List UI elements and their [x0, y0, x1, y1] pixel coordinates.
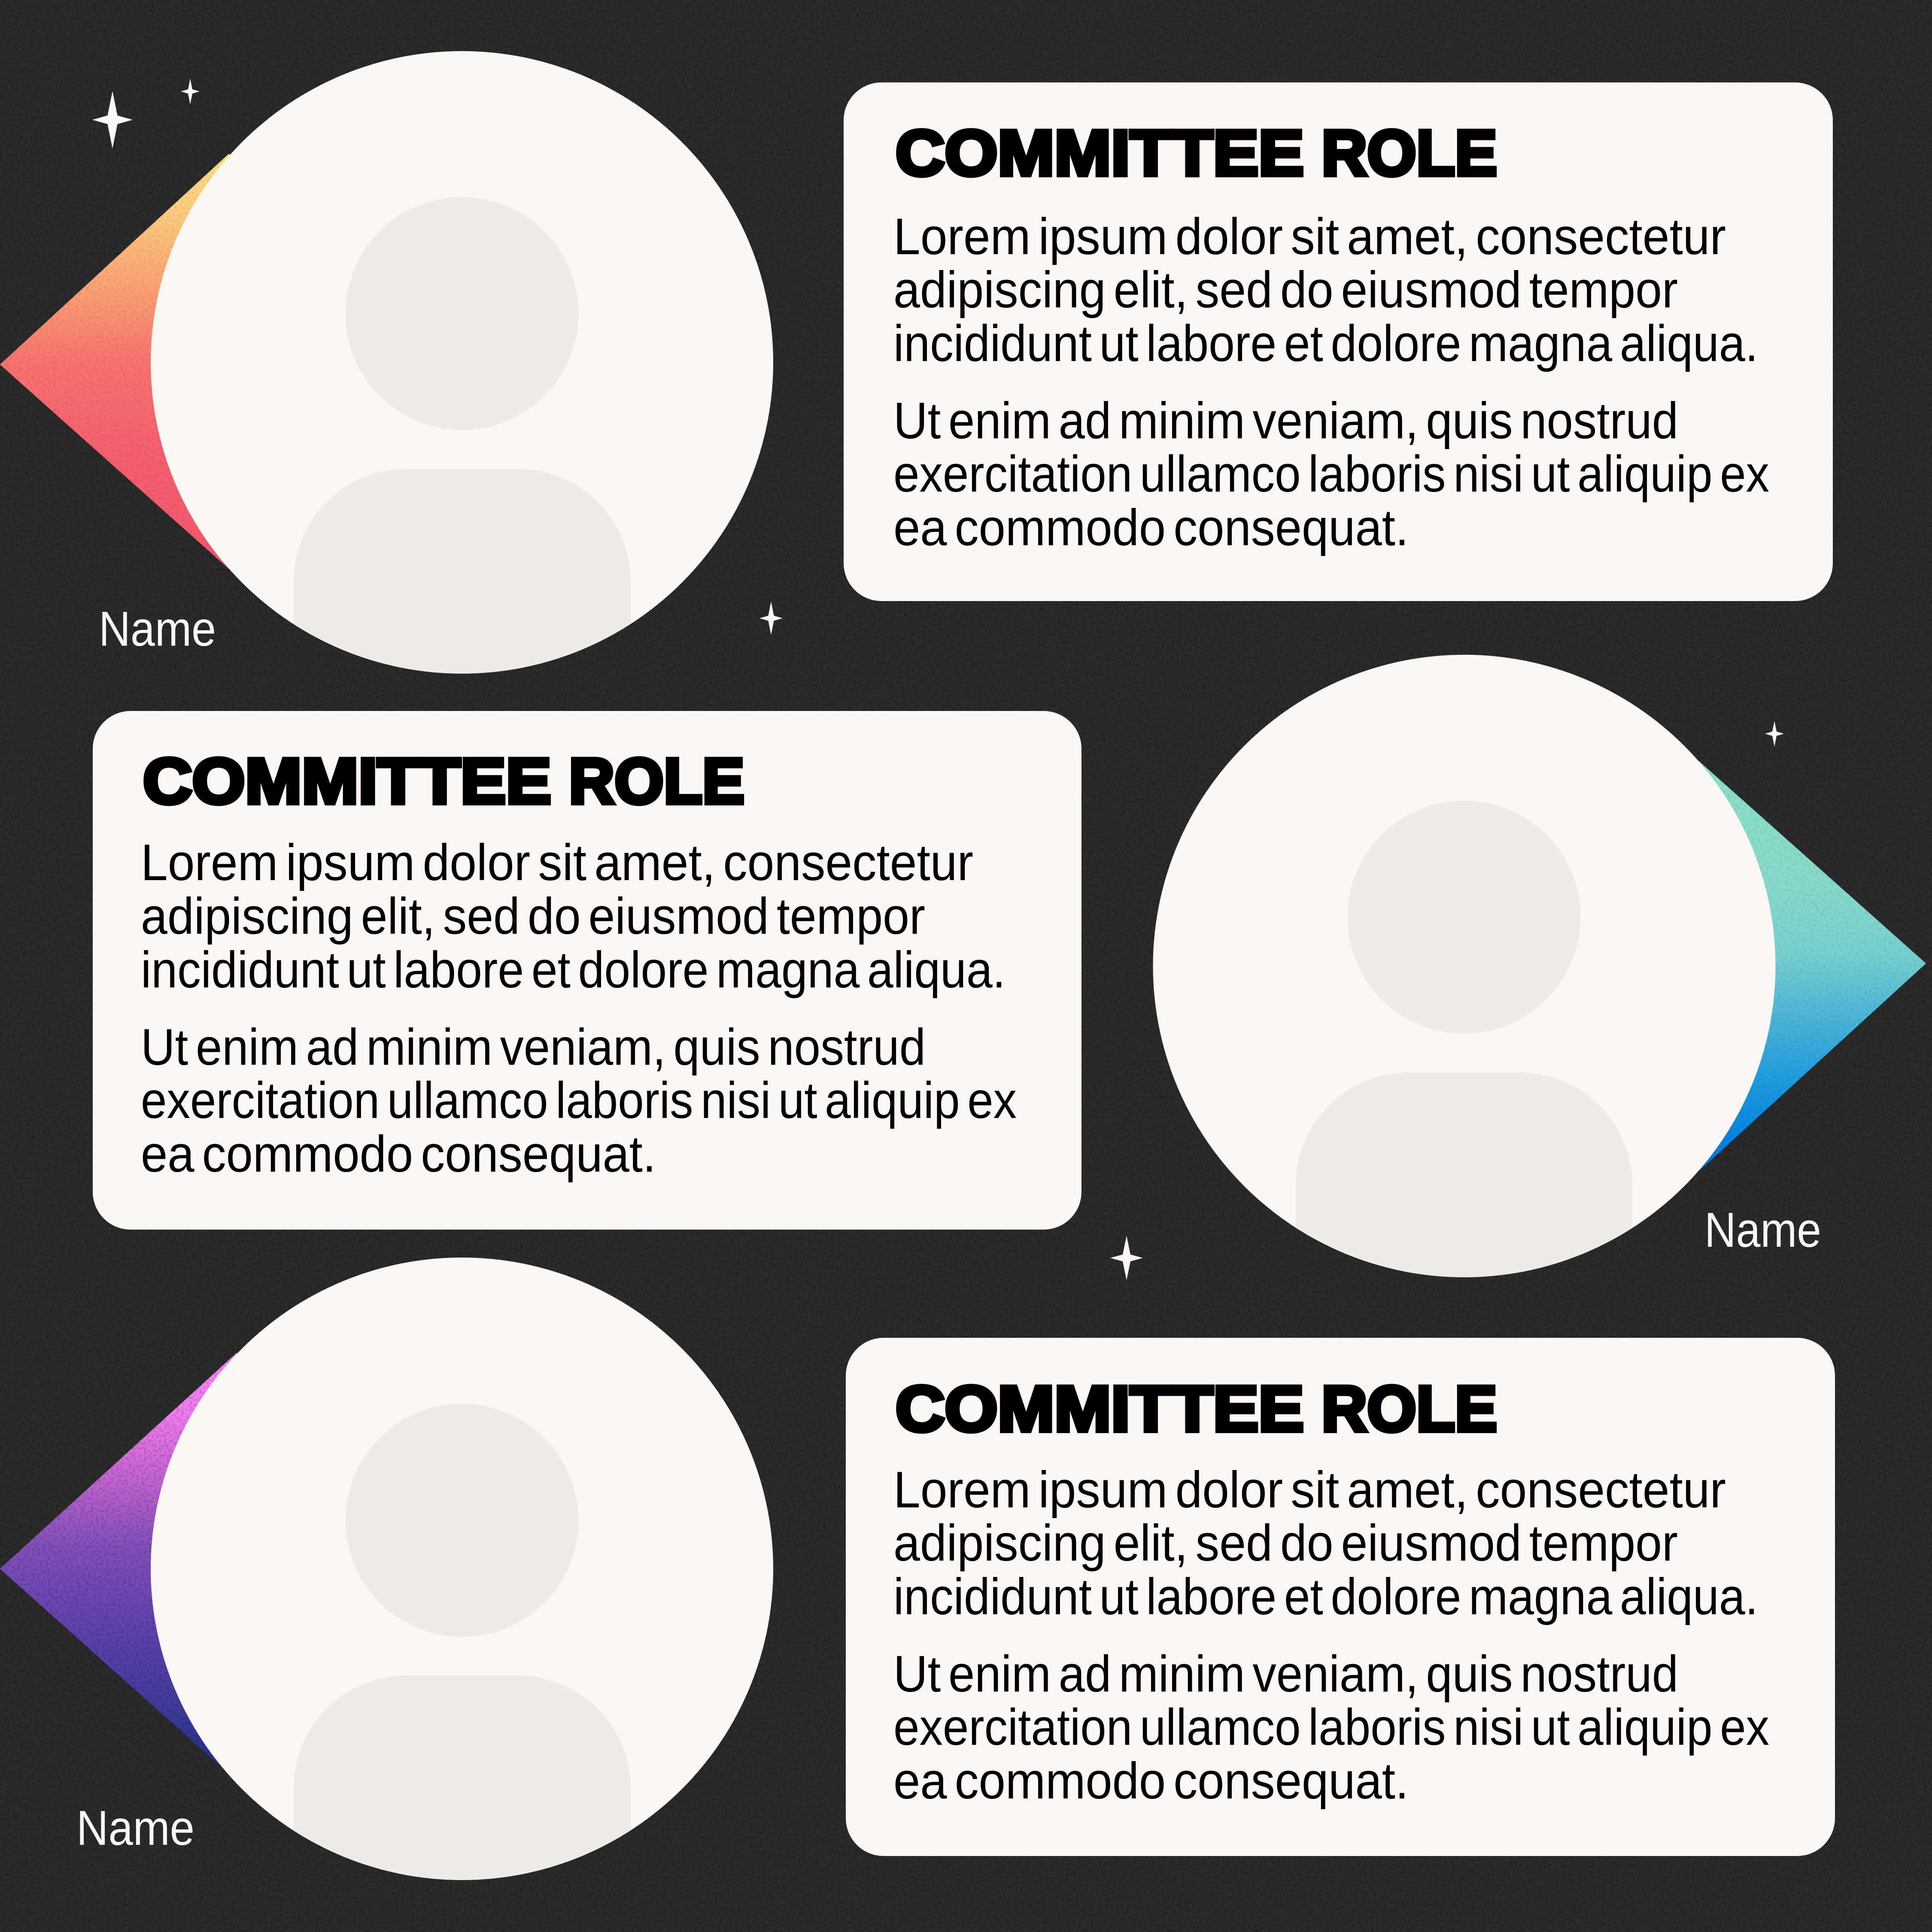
- body text 2: [141, 834, 1017, 1183]
- name label 2: Name: [1704, 1203, 1821, 1258]
- panel: role card 2: [93, 711, 1081, 1230]
- body text 1: Ut enim ad minim veniam, quis nostrud: [893, 392, 1678, 450]
- name label 3: Name: [76, 1801, 194, 1856]
- icon: small sparkle top left: [181, 79, 200, 104]
- body text 2: incididunt ut labore et dolore magna aliqua.: [141, 941, 1005, 999]
- body text 3: [893, 1461, 1769, 1810]
- panel: profile 3: [0, 1258, 773, 1889]
- body text 1: incididunt ut labore et dolore magna aliqua.: [893, 315, 1758, 372]
- heading 2: COMMITTEE: [143, 745, 551, 817]
- body text 1: Lorem ipsum dolor sit amet, consectetur: [893, 208, 1726, 265]
- avatar disc 3: [151, 1258, 773, 1880]
- avatar disc 2: [1153, 655, 1776, 1277]
- panel: role card 3: [846, 1338, 1835, 1856]
- body text 3: ea commodo consequat.: [893, 1752, 1409, 1810]
- body text 3: adipiscing elit, sed do eiusmod tempor: [893, 1514, 1678, 1572]
- icon: sparkle near profile 1: [759, 601, 783, 635]
- body text 3: incididunt ut labore et dolore magna aliqua.: [893, 1568, 1758, 1625]
- avatar disc 1: [151, 51, 773, 674]
- gradient cone: red-yellow: [0, 154, 230, 569]
- body text 2: Ut enim ad minim veniam, quis nostrud: [141, 1018, 926, 1076]
- avatar head 2: [1347, 800, 1581, 1034]
- heading 2: ROLE: [569, 745, 744, 817]
- panel: profile 2: [1153, 655, 1932, 1288]
- body text 2: Lorem ipsum dolor sit amet, consectetur: [141, 834, 973, 891]
- body text 1: [893, 208, 1769, 556]
- body text 2: adipiscing elit, sed do eiusmod tempor: [141, 887, 925, 945]
- body text 2: exercitation ullamco laboris nisi ut aliquip ex: [141, 1072, 1017, 1129]
- avatar head 1: [345, 197, 579, 430]
- gradient cone: teal-blue: [1460, 756, 1932, 1176]
- body text 3: exercitation ullamco laboris nisi ut aliquip ex: [893, 1698, 1769, 1756]
- body text 3: Ut enim ad minim veniam, quis nostrud: [893, 1645, 1678, 1703]
- avatar head 3: [345, 1404, 579, 1637]
- heading 1: [896, 117, 1497, 189]
- heading 3: COMMITTEE: [896, 1373, 1304, 1445]
- avatar shoulders 2: [1296, 1072, 1632, 1288]
- name label 1: Name: [99, 602, 216, 656]
- heading 1: COMMITTEE: [896, 117, 1304, 189]
- panel: profile 1: [0, 51, 773, 687]
- body text 3: Lorem ipsum dolor sit amet, consectetur: [893, 1461, 1726, 1519]
- heading 1: ROLE: [1321, 117, 1497, 189]
- body text 2: ea commodo consequat.: [141, 1125, 656, 1183]
- avatar shoulders 3: [294, 1676, 631, 1889]
- body text 1: exercitation ullamco laboris nisi ut aliquip ex: [893, 445, 1769, 503]
- body text 1: ea commodo consequat.: [893, 499, 1409, 556]
- body text 1: adipiscing elit, sed do eiusmod tempor: [893, 261, 1678, 319]
- icon: large sparkle top left: [92, 91, 133, 149]
- gradient cone: pink-purple: [0, 1348, 464, 1769]
- heading 2: [143, 745, 744, 817]
- avatar shoulders 1: [294, 469, 631, 687]
- icon: sparkle near profile 2: [1765, 721, 1784, 747]
- heading 3: ROLE: [1321, 1373, 1497, 1445]
- panel: role card 1: [844, 82, 1833, 601]
- heading 3: [896, 1373, 1497, 1445]
- icon: sparkle left of profile 2: [1110, 1236, 1143, 1280]
